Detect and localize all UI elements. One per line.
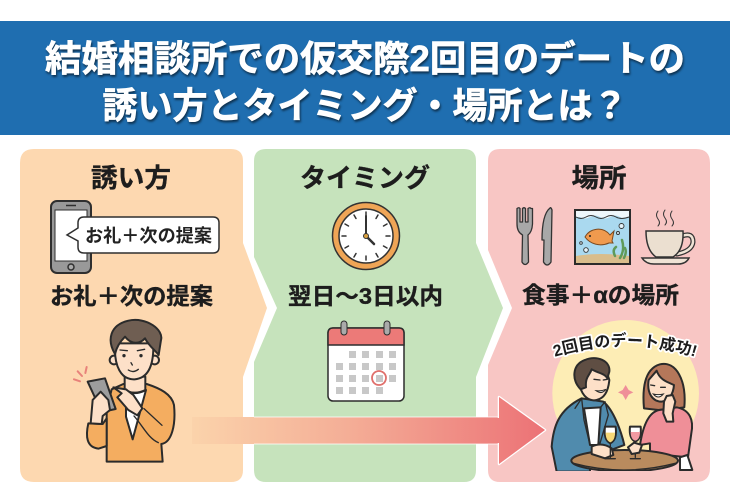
heading: タイミング: タイミング [300, 163, 430, 193]
heading: 場所: 場所 [572, 163, 626, 193]
title: 誘い方とタイミング・場所とは？ [102, 85, 628, 126]
panel: 誘い方 [20, 149, 267, 482]
text: 食事＋αの場所: 食事＋αの場所 [522, 282, 679, 308]
icon: calendar [328, 321, 404, 401]
icon: aquarium [575, 210, 630, 264]
text: お礼＋次の提案: お礼＋次の提案 [50, 283, 213, 309]
panel: タイミング [254, 149, 503, 482]
icon: clock [332, 202, 400, 270]
caption: 2回目のデート成功!: 2回目のデート成功! [552, 330, 698, 358]
illustration: man with smartphone [74, 320, 174, 462]
heading: 誘い方: 誘い方 [91, 163, 171, 193]
title [45, 38, 685, 126]
arrow: flow to success [192, 397, 545, 464]
title: 結婚相談所での仮交際2回目のデートの [45, 38, 685, 79]
icon: fork and knife [517, 208, 552, 265]
speech bubble [67, 217, 219, 253]
text: 翌日〜3日以内: 翌日～3日以内 [288, 283, 443, 309]
speech bubble: お礼＋次の提案 [85, 225, 212, 246]
header band [0, 21, 730, 135]
icon: smartphone with speech bubble [51, 201, 219, 273]
panel: 場所 [488, 149, 710, 482]
illustration: couple at table [552, 320, 699, 472]
icon: coffee cup [642, 210, 693, 264]
